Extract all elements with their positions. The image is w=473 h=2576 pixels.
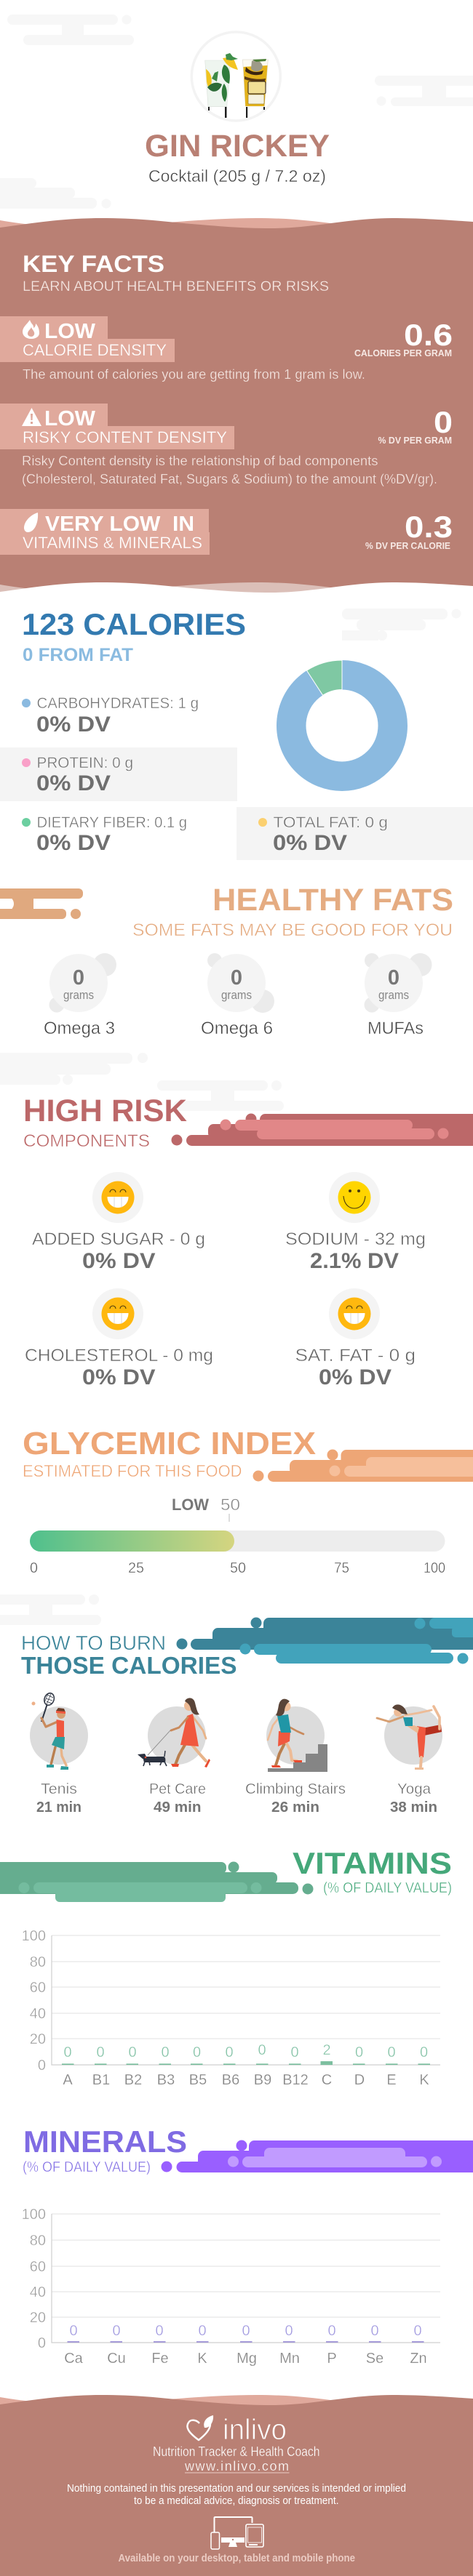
bar chart: minerals: 0 [285, 2323, 293, 2339]
heading: vitamins: VITAMINS [293, 1846, 452, 1880]
donut chart [291, 660, 393, 777]
unit: % DV PER GRAM [378, 435, 452, 446]
icon: amber iced glass [243, 59, 268, 118]
legend: carbohydrates: 0% DV [36, 713, 111, 737]
icon: warning triangle [22, 408, 41, 426]
bar chart: vitamins: 0 [96, 2045, 105, 2061]
tagline: Nutrition Tracker & Health Coach [153, 2444, 320, 2459]
bar chart: vitamins: 0 [161, 2045, 170, 2061]
label: risky content density: RISKY CONTENT DENSITY [23, 428, 227, 446]
heading: minerals: MINERALS [23, 2124, 187, 2159]
subheading: LEARN ABOUT HEALTH BENEFITS OR RISKS [23, 279, 329, 294]
stat: mufas: grams [378, 988, 409, 1002]
icon: woman on stairs [268, 1699, 327, 1772]
bar chart: minerals: Mn [279, 2351, 300, 2367]
item: cholesterol: 0% DV [82, 1365, 156, 1389]
stat: omega 3 [44, 953, 116, 1038]
item: added sugar: ADDED SUGAR - 0 g [32, 1229, 205, 1249]
bar chart: minerals: Fe [151, 2351, 169, 2367]
disclaimer [67, 2482, 406, 2507]
subheading: (% OF DAILY VALUE) [23, 2159, 151, 2175]
bar chart: minerals: 0 [155, 2323, 164, 2339]
bar chart: vitamins: 0 [128, 2045, 137, 2061]
panel backgrounds [0, 747, 473, 860]
icon: flame [23, 320, 39, 339]
decoration: purple bands [162, 2140, 473, 2172]
bar chart: vitamins: 80 [30, 1954, 46, 1970]
bar chart: vitamins: B6 [222, 2072, 239, 2088]
icon: grin [102, 1297, 134, 1331]
legend: carbohydrates [22, 695, 199, 737]
disclaimer: Nothing contained in this presentation and our services is intended or implied [67, 2482, 406, 2495]
bar chart: vitamins: B5 [189, 2072, 207, 2088]
bar chart: minerals: Se [366, 2351, 383, 2367]
value: 0.6: 0.6 [404, 318, 453, 352]
bar chart: vitamins: 60 [30, 1980, 46, 1996]
legend: protein [22, 755, 133, 795]
icon: grin [102, 1181, 134, 1214]
bar chart: minerals: 0 [69, 2323, 78, 2339]
decoration: tan bands [0, 888, 83, 919]
bar chart: minerals: Cu [107, 2351, 126, 2367]
heading: how to burn: HOW TO BURN [21, 1632, 166, 1654]
item: cholesterol: CHOLESTEROL - 0 mg [25, 1346, 213, 1365]
icon: smile [338, 1181, 371, 1214]
bar chart: vitamins: 0 [38, 2058, 46, 2074]
activity: pet care: 49 min [154, 1799, 201, 1815]
bar chart: vitamins: 0 [225, 2045, 234, 2061]
panel: glycemic index [23, 1426, 473, 1576]
bar chart: vitamins: 0 [420, 2045, 428, 2061]
bar chart: minerals: 20 [30, 2310, 46, 2326]
logo: wordmark: inlivo [223, 2414, 287, 2446]
bar chart: vitamins: C [322, 2072, 332, 2088]
subheading: components: COMPONENTS [23, 1131, 150, 1151]
bar chart: vitamins: 40 [30, 2006, 46, 2022]
bar chart: vitamins: 0 [193, 2045, 201, 2061]
bar chart: minerals: Mg [236, 2351, 257, 2367]
item: added sugar: 0% DV [82, 1249, 156, 1273]
header: food image [191, 32, 280, 121]
disclaimer: to be a medical advice, diagnosis or treatment. [134, 2495, 339, 2507]
icon: devices [211, 2517, 263, 2549]
stat: omega 6 [201, 953, 274, 1038]
panel: high risk components [23, 1094, 473, 1389]
website link: www.inlivo.com [184, 2459, 289, 2473]
heading: glycemic index: GLYCEMIC INDEX [23, 1426, 316, 1461]
gauge value: low: LOW [172, 1496, 209, 1514]
item: saturated fat: 0% DV [319, 1365, 391, 1389]
bar chart: minerals: Zn [410, 2351, 427, 2367]
subheading: SOME FATS MAY BE GOOD FOR YOU [132, 920, 453, 940]
fact: calorie density [0, 316, 453, 382]
icon: yoga pose [377, 1704, 442, 1770]
activity: yoga: Yoga [397, 1781, 432, 1797]
bar chart: vitamins: A [63, 2072, 73, 2088]
activity: tennis: 21 min [36, 1799, 82, 1815]
bar chart: minerals: K [197, 2351, 207, 2367]
stat: omega 6: Omega 6 [201, 1019, 273, 1038]
bar chart: vitamins [22, 1928, 440, 2088]
bar chart: vitamins: 20 [30, 2031, 46, 2047]
value: 0.3: 0.3 [405, 510, 453, 544]
heading: those calories: THOSE CALORIES [21, 1652, 237, 1679]
bar chart: minerals: 0 [242, 2323, 250, 2339]
gauge scale: 0 [30, 1560, 38, 1576]
activity: climbing stairs: Climbing Stairs [245, 1781, 346, 1797]
panel: footer [0, 2395, 473, 2576]
unit: CALORIES PER GRAM [354, 348, 452, 358]
icon: tennis player [32, 1692, 68, 1770]
bar chart: minerals: 0 [112, 2323, 121, 2339]
bar chart: vitamins: 2 [322, 2042, 331, 2058]
decoration: orange bands [253, 1450, 473, 1482]
stat: mufas [364, 953, 432, 1038]
decoration: green bands [0, 1861, 313, 1902]
bar chart: vitamins: D [354, 2072, 365, 2088]
stat: omega 6: 0 [231, 966, 242, 990]
gauge scale: 75 [334, 1560, 349, 1576]
subheading: from fat: 0 FROM FAT [23, 645, 133, 665]
item: sodium: SODIUM - 32 mg [285, 1229, 426, 1249]
gauge scale: 25 [128, 1560, 144, 1576]
bar chart: minerals: 0 [370, 2323, 379, 2339]
bar chart: vitamins: 0 [63, 2045, 72, 2061]
legend: protein: 0% DV [36, 771, 111, 795]
subheading: (% OF DAILY VALUE) [323, 1880, 452, 1896]
bar chart: vitamins: 0 [258, 2042, 266, 2058]
label: low: LOW [44, 320, 96, 343]
bar chart: vitamins: B9 [254, 2072, 271, 2088]
gauge bar [30, 1530, 445, 1552]
bar chart: minerals [22, 2207, 440, 2367]
bar chart: vitamins: B12 [282, 2072, 309, 2088]
heading: healthy fats: HEALTHY FATS [212, 883, 453, 918]
bar chart: vitamins: 0 [387, 2045, 396, 2061]
label: vitamins and minerals: VITAMINS & MINERALS [23, 534, 202, 552]
unit: % DV PER CALORIE [365, 540, 450, 551]
bar chart: minerals: P [327, 2351, 337, 2367]
activity: pet care [138, 1698, 210, 1815]
bar chart: vitamins: E [386, 2072, 397, 2088]
description: The amount of calories you are getting from 1 gram is low. [23, 367, 365, 382]
label: low: LOW [44, 407, 96, 430]
fact: vitamins and minerals [0, 509, 453, 555]
item: sodium [285, 1172, 426, 1273]
decoration: red bands [172, 1114, 473, 1146]
bar chart: minerals: Ca [64, 2351, 84, 2367]
bar chart: vitamins: B2 [124, 2072, 142, 2088]
gauge scale [30, 1560, 445, 1576]
legend: total fat: TOTAL FAT: 0 g [274, 814, 388, 831]
stat: mufas: 0 [388, 966, 400, 990]
panel: vitamins [0, 1846, 452, 2088]
value: 0: 0 [434, 405, 453, 439]
stat: omega 3: Omega 3 [44, 1019, 115, 1038]
bar chart: minerals: 0 [327, 2323, 336, 2339]
label: calorie density: CALORIE DENSITY [23, 341, 167, 359]
bar chart: vitamins: 100 [22, 1928, 46, 1944]
activity: pet care: Pet Care [149, 1781, 206, 1797]
legend: carbohydrates: CARBOHYDRATES: 1 g [36, 695, 199, 712]
gauge scale: 50 [230, 1560, 246, 1576]
gauge value: 50: 50 [220, 1496, 240, 1514]
bar chart: minerals: 60 [30, 2259, 46, 2275]
bar chart: vitamins: B3 [157, 2072, 175, 2088]
fact: risky content density [0, 404, 453, 486]
item: cholesterol [25, 1288, 213, 1389]
stat: omega 3: 0 [73, 966, 84, 990]
panel: key facts [0, 218, 473, 607]
bar chart: minerals: 40 [30, 2284, 46, 2300]
item: saturated fat [295, 1288, 416, 1389]
panel: burn calories [21, 1617, 473, 1815]
panel: healthy fats [0, 883, 453, 1038]
bar chart: vitamins: 0 [355, 2045, 363, 2061]
logo: heart and leaf [187, 2415, 213, 2440]
item: added sugar [32, 1172, 205, 1273]
icon: leaf [24, 513, 38, 532]
stat: omega 6: grams [221, 988, 252, 1002]
description [22, 454, 437, 486]
bar chart: vitamins: 0 [290, 2045, 299, 2061]
bar chart: minerals: 0 [198, 2323, 207, 2339]
legend: total fat: 0% DV [273, 831, 347, 855]
bar chart: minerals: 100 [22, 2207, 46, 2223]
stat: mufas: MUFAs [367, 1019, 424, 1038]
stat: omega 3: grams [63, 988, 94, 1002]
item: sodium: 2.1% DV [310, 1249, 399, 1273]
legend: dietary fiber [22, 814, 187, 855]
activity: tennis [30, 1692, 88, 1815]
legend: total fat [258, 814, 388, 855]
bar chart: minerals: 0 [38, 2335, 46, 2351]
description: (Cholesterol, Saturated Fat, Sugars & Sodium) to the amount (%DV/gr). [22, 472, 437, 486]
title: GIN RICKEY [145, 129, 330, 164]
activity: tennis: Tenis [41, 1781, 77, 1797]
bar chart: minerals: 0 [413, 2323, 422, 2339]
activity: yoga [377, 1704, 442, 1815]
icon: woman walking dog [138, 1698, 210, 1768]
icon: mint lemon glass [205, 53, 238, 118]
bar chart: vitamins: K [419, 2072, 429, 2088]
heading: high risk: HIGH RISK [23, 1094, 187, 1128]
panel: calories [0, 607, 473, 860]
subtitle: Cocktail (205 g / 7.2 oz) [148, 166, 326, 185]
activity: yoga: 38 min [390, 1799, 437, 1815]
bar chart: vitamins: B1 [92, 2072, 110, 2088]
label: very low in: VERY LOW IN [45, 513, 194, 536]
legend: dietary fiber: 0% DV [36, 831, 111, 855]
subheading: ESTIMATED FOR THIS FOOD [23, 1461, 242, 1480]
legend: protein: PROTEIN: 0 g [36, 755, 133, 771]
activity: climbing stairs: 26 min [271, 1799, 319, 1815]
heading: 123 calories: 123 CALORIES [22, 607, 246, 641]
legend: dietary fiber: DIETARY FIBER: 0.1 g [36, 814, 187, 831]
bar chart: minerals: 80 [30, 2233, 46, 2249]
availability note: Available on your desktop, tablet and mobile phone [118, 2552, 355, 2564]
panel: minerals [22, 2124, 473, 2367]
description: Risky Content density is the relationship of bad components [22, 454, 378, 468]
gauge scale: 100 [424, 1560, 445, 1576]
icon: grin [338, 1297, 371, 1331]
activity: climbing stairs [245, 1699, 346, 1815]
decoration: teal bands [176, 1617, 473, 1664]
item: saturated fat: SAT. FAT - 0 g [295, 1346, 416, 1365]
heading: key facts: KEY FACTS [23, 251, 164, 277]
